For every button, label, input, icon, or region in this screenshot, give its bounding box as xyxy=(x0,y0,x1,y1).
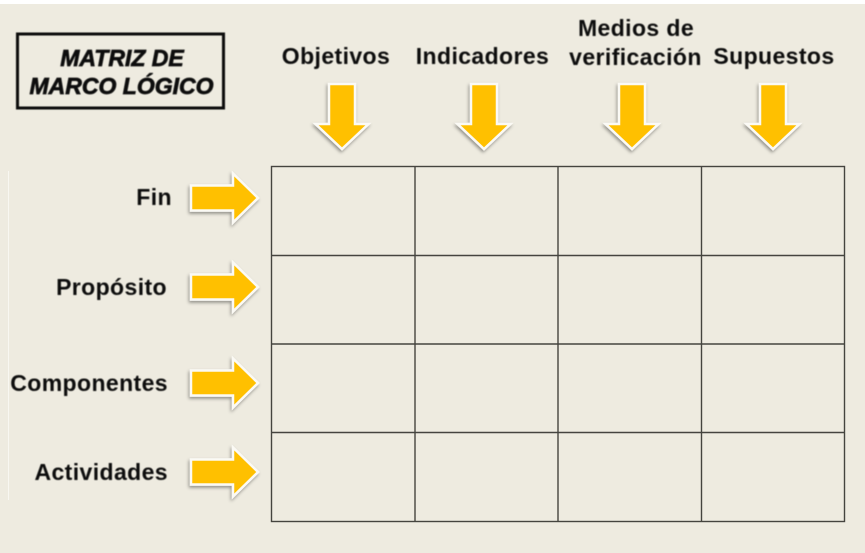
column headings: Objetivos xyxy=(282,43,390,69)
title: MATRIZ DE xyxy=(60,45,184,71)
row headings: Componentes xyxy=(10,370,168,396)
row headings: Fin xyxy=(136,184,172,210)
column arrows xyxy=(316,84,800,149)
title box xyxy=(18,34,224,108)
column headings: Indicadores xyxy=(416,43,549,69)
row headings xyxy=(10,184,172,485)
row headings: Actividades xyxy=(34,459,168,485)
column headings: verificación xyxy=(569,44,702,70)
row arrows xyxy=(191,174,258,496)
column headings: Medios de xyxy=(578,15,694,41)
title: MARCO LÓGICO xyxy=(30,72,214,99)
column headings xyxy=(282,15,835,70)
row headings: Propósito xyxy=(56,274,167,300)
column headings: Supuestos xyxy=(713,43,835,69)
matrix grid xyxy=(271,166,845,522)
